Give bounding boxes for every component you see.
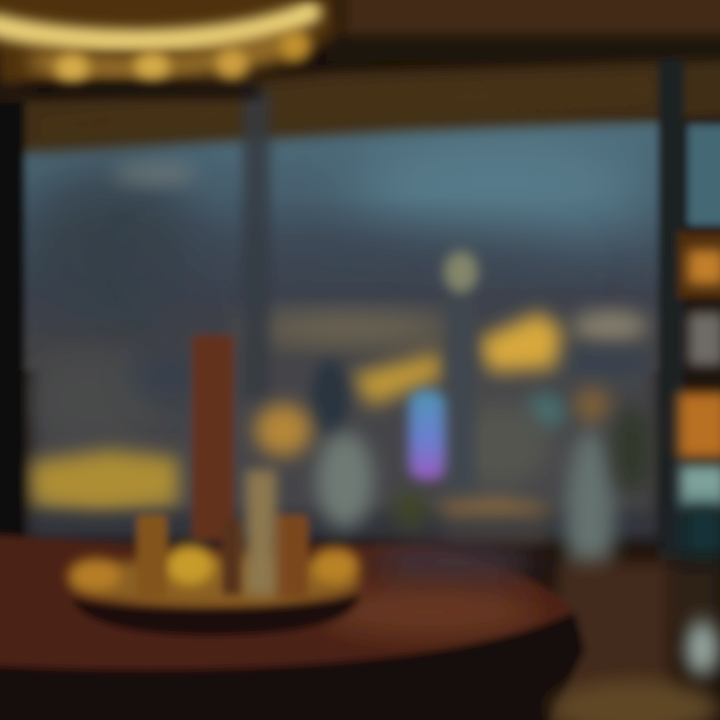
table edge shadow: [0, 612, 585, 720]
vertical pole: [243, 90, 270, 400]
city skyline: [25, 310, 665, 539]
window sky: [20, 120, 670, 370]
right edge panels: [672, 125, 720, 676]
string lights: [0, 0, 335, 98]
ceiling beams: [0, 0, 720, 152]
left dark pillar: [0, 100, 25, 540]
silhouette figures: [311, 360, 652, 610]
floor beyond table: [520, 560, 672, 720]
neon billboard: [409, 390, 445, 480]
table top: [0, 535, 572, 669]
lower right wood: [550, 680, 720, 720]
tray: [69, 545, 360, 636]
tower: [444, 251, 478, 488]
right dark pillar: [658, 60, 684, 560]
centerpiece columns: [137, 335, 311, 597]
